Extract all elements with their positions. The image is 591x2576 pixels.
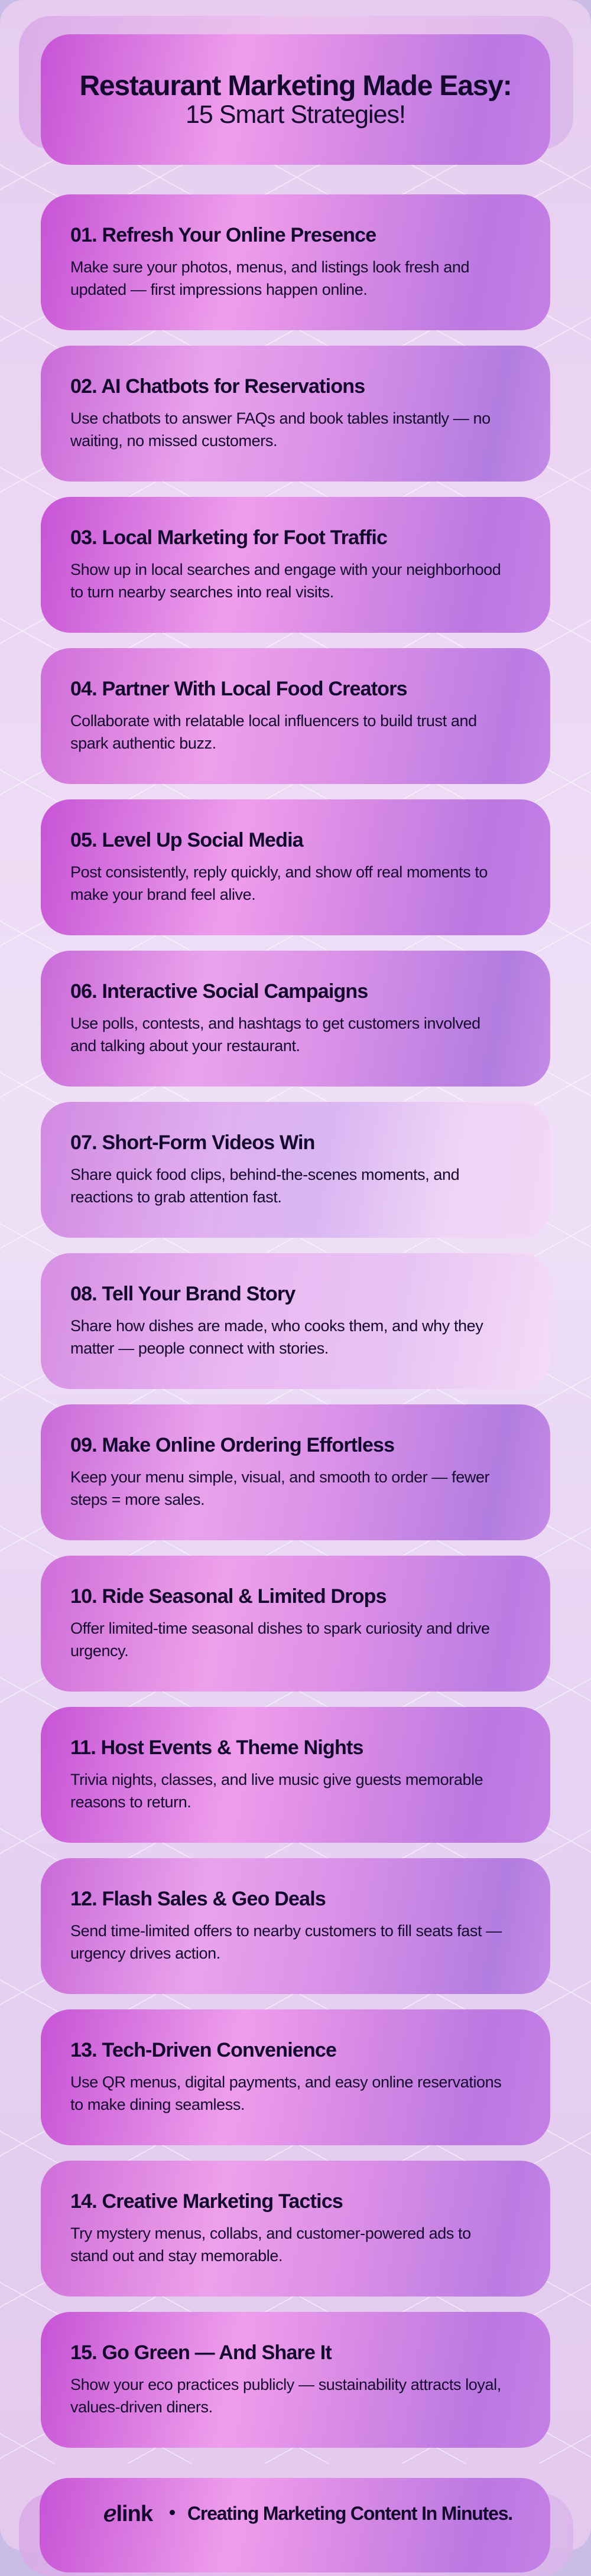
card 08: matter — people connect with stories. [70,1339,329,1357]
card 03: Show up in local searches and engage with your neighborhood [70,561,501,578]
card 04: 04. Partner With Local Food Creators [70,678,407,700]
card 11: reasons to return. [70,1793,191,1811]
footer backdrop panel [19,2493,573,2576]
card 01: 01. Refresh Your Online Presence [70,224,376,246]
card 10: 10. Ride Seasonal & Limited Drops [70,1585,387,1608]
footer tagline: Creating Marketing Content In Minutes. [187,2503,512,2524]
card 04: spark authentic buzz. [70,734,216,752]
card 13 [41,2009,550,2145]
card 06 [41,951,550,1087]
card 13: 13. Tech-Driven Convenience [70,2039,336,2061]
card 14 [41,2161,550,2297]
card 10: Offer limited-time seasonal dishes to spark curiosity and drive [70,1619,490,1637]
card 10 [41,1556,550,1692]
card 11 [41,1707,550,1843]
card 05: Post consistently, reply quickly, and show off real moments to [70,863,488,881]
card 05: make your brand feel alive. [70,886,255,903]
card 12: Send time-limited offers to nearby customers to fill seats fast — [70,1922,502,1940]
card 09: Keep your menu simple, visual, and smooth to order — fewer [70,1468,489,1486]
card 12: urgency drives action. [70,1944,220,1962]
card 14: Try mystery menus, collabs, and customer-powered ads to [70,2224,471,2242]
card 02: Use chatbots to answer FAQs and book tables instantly — no [70,409,491,427]
card 07: 07. Short-Form Videos Win [70,1131,315,1154]
card 06: and talking about your restaurant. [70,1037,300,1055]
card 11: Trivia nights, classes, and live music give guests memorable [70,1771,483,1788]
card 07 [41,1102,550,1238]
card 14: 14. Creative Marketing Tactics [70,2190,343,2213]
card 02: 02. AI Chatbots for Reservations [70,375,365,398]
card 15: 15. Go Green — And Share It [70,2341,332,2364]
card 15: Show your eco practices publicly — sustainability attracts loyal, [70,2376,501,2393]
card 03: 03. Local Marketing for Foot Traffic [70,526,387,549]
card 08: Share how dishes are made, who cooks them, and why they [70,1317,483,1335]
card 08: 08. Tell Your Brand Story [70,1283,296,1305]
card 03: to turn nearby searches into real visits. [70,583,334,601]
card 12 [41,1858,550,1994]
card 14: stand out and stay memorable. [70,2247,282,2265]
card 15: values-driven diners. [70,2398,213,2416]
card 03 [41,497,550,633]
title backdrop panel [19,16,573,149]
card 09: steps = more sales. [70,1491,204,1508]
subtitle: 15 Smart Strategies! [186,100,405,129]
card 10: urgency. [70,1642,128,1660]
footer logo: ℯlink [103,2502,152,2526]
card 01 [41,194,550,330]
card 06: Use polls, contests, and hashtags to get customers involved [70,1014,480,1032]
card 15 [41,2312,550,2448]
footer card [40,2478,550,2572]
card 11: 11. Host Events & Theme Nights [70,1736,363,1759]
card 07: Share quick food clips, behind-the-scenes moments, and [70,1166,459,1183]
card 04 [41,648,550,784]
card 13: to make dining seamless. [70,2096,245,2113]
card 04: Collaborate with relatable local influencers to build trust and [70,712,477,730]
card 08 [41,1253,550,1389]
footer bullet [170,2510,175,2515]
card 09 [41,1404,550,1540]
title card [41,34,550,165]
card 02 [41,346,550,482]
card 12: 12. Flash Sales & Geo Deals [70,1888,326,1910]
card 13: Use QR menus, digital payments, and easy online reservations [70,2073,501,2091]
card 09: 09. Make Online Ordering Effortless [70,1434,394,1456]
card 07: reactions to grab attention fast. [70,1188,282,1206]
card 06: 06. Interactive Social Campaigns [70,980,368,1003]
card 05: 05. Level Up Social Media [70,829,303,851]
card 02: waiting, no missed customers. [70,432,277,450]
card 05 [41,799,550,935]
card 01: Make sure your photos, menus, and listings look fresh and [70,258,469,276]
card 01: updated — first impressions happen online. [70,281,368,298]
title heading: Restaurant Marketing Made Easy: [79,70,512,102]
